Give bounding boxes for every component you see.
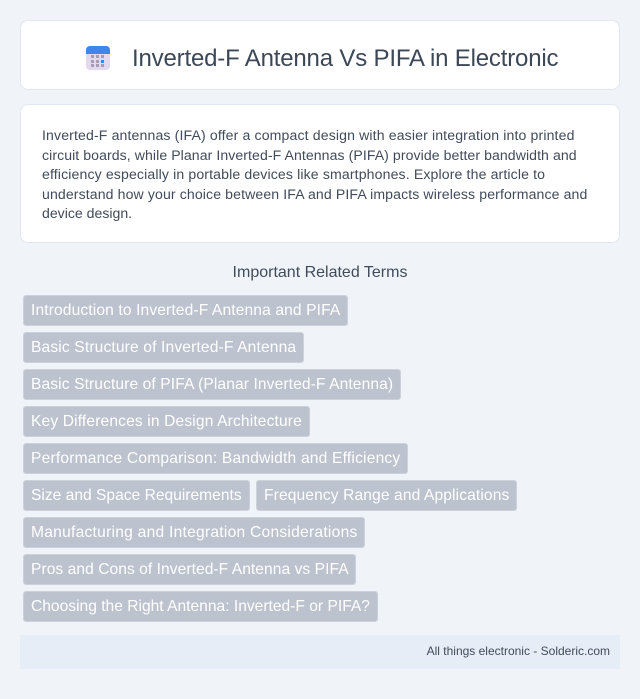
heading: related terms: Important Related Terms <box>233 264 407 281</box>
title: Inverted-F Antenna Vs PIFA in Electronic <box>132 45 558 72</box>
tag: basic structure IFA: Basic Structure of Inverted-F Antenna <box>31 339 296 356</box>
tag: basic structure IFA <box>23 332 304 363</box>
tag: choosing: Choosing the Right Antenna: Inverted-F or PIFA? <box>31 598 370 615</box>
tag: performance: Performance Comparison: Bandwidth and Efficiency <box>31 450 400 467</box>
intro text panel: understand how your choice between IFA and PIFA impacts wireless performance and <box>42 186 587 202</box>
intro text panel: efficiency especially in portable devices like smartphones. Explore the article to <box>42 166 545 182</box>
tag: introduction <box>23 295 348 326</box>
tag: design differences: Key Differences in Design Architecture <box>31 413 302 430</box>
header card <box>20 20 620 90</box>
tag: manufacturing <box>23 517 365 548</box>
tag: size: Size and Space Requirements <box>31 487 242 504</box>
tag: pros and cons: Pros and Cons of Inverted-F Antenna vs PIFA <box>31 561 349 578</box>
tag: basic structure PIFA <box>23 369 401 400</box>
tag: performance <box>23 443 408 474</box>
tag: design differences <box>23 406 310 437</box>
intro text panel: circuit boards, while Planar Inverted-F Antennas (PIFA) provide better bandwidth and <box>42 147 577 163</box>
intro text panel <box>20 104 620 243</box>
tag list <box>23 295 517 622</box>
footer bar <box>20 635 620 669</box>
tag: frequency <box>256 480 517 511</box>
tag: basic structure PIFA: Basic Structure of PIFA (Planar Inverted-F Antenna) <box>31 376 393 393</box>
tag: introduction: Introduction to Inverted-F Antenna and PIFA <box>31 302 340 319</box>
tag: choosing <box>23 591 378 622</box>
tag: manufacturing: Manufacturing and Integration Considerations <box>31 524 358 541</box>
tag: frequency: Frequency Range and Applications <box>264 487 509 504</box>
tag: size <box>23 480 250 511</box>
intro text panel: device design. <box>42 205 132 221</box>
intro text panel: Inverted-F antennas (IFA) offer a compact design with easier integration into printed <box>42 127 575 143</box>
icon: calendar <box>86 46 110 70</box>
footer bar: All things electronic - Solderic.com <box>427 644 610 658</box>
tag: pros and cons <box>23 554 356 585</box>
